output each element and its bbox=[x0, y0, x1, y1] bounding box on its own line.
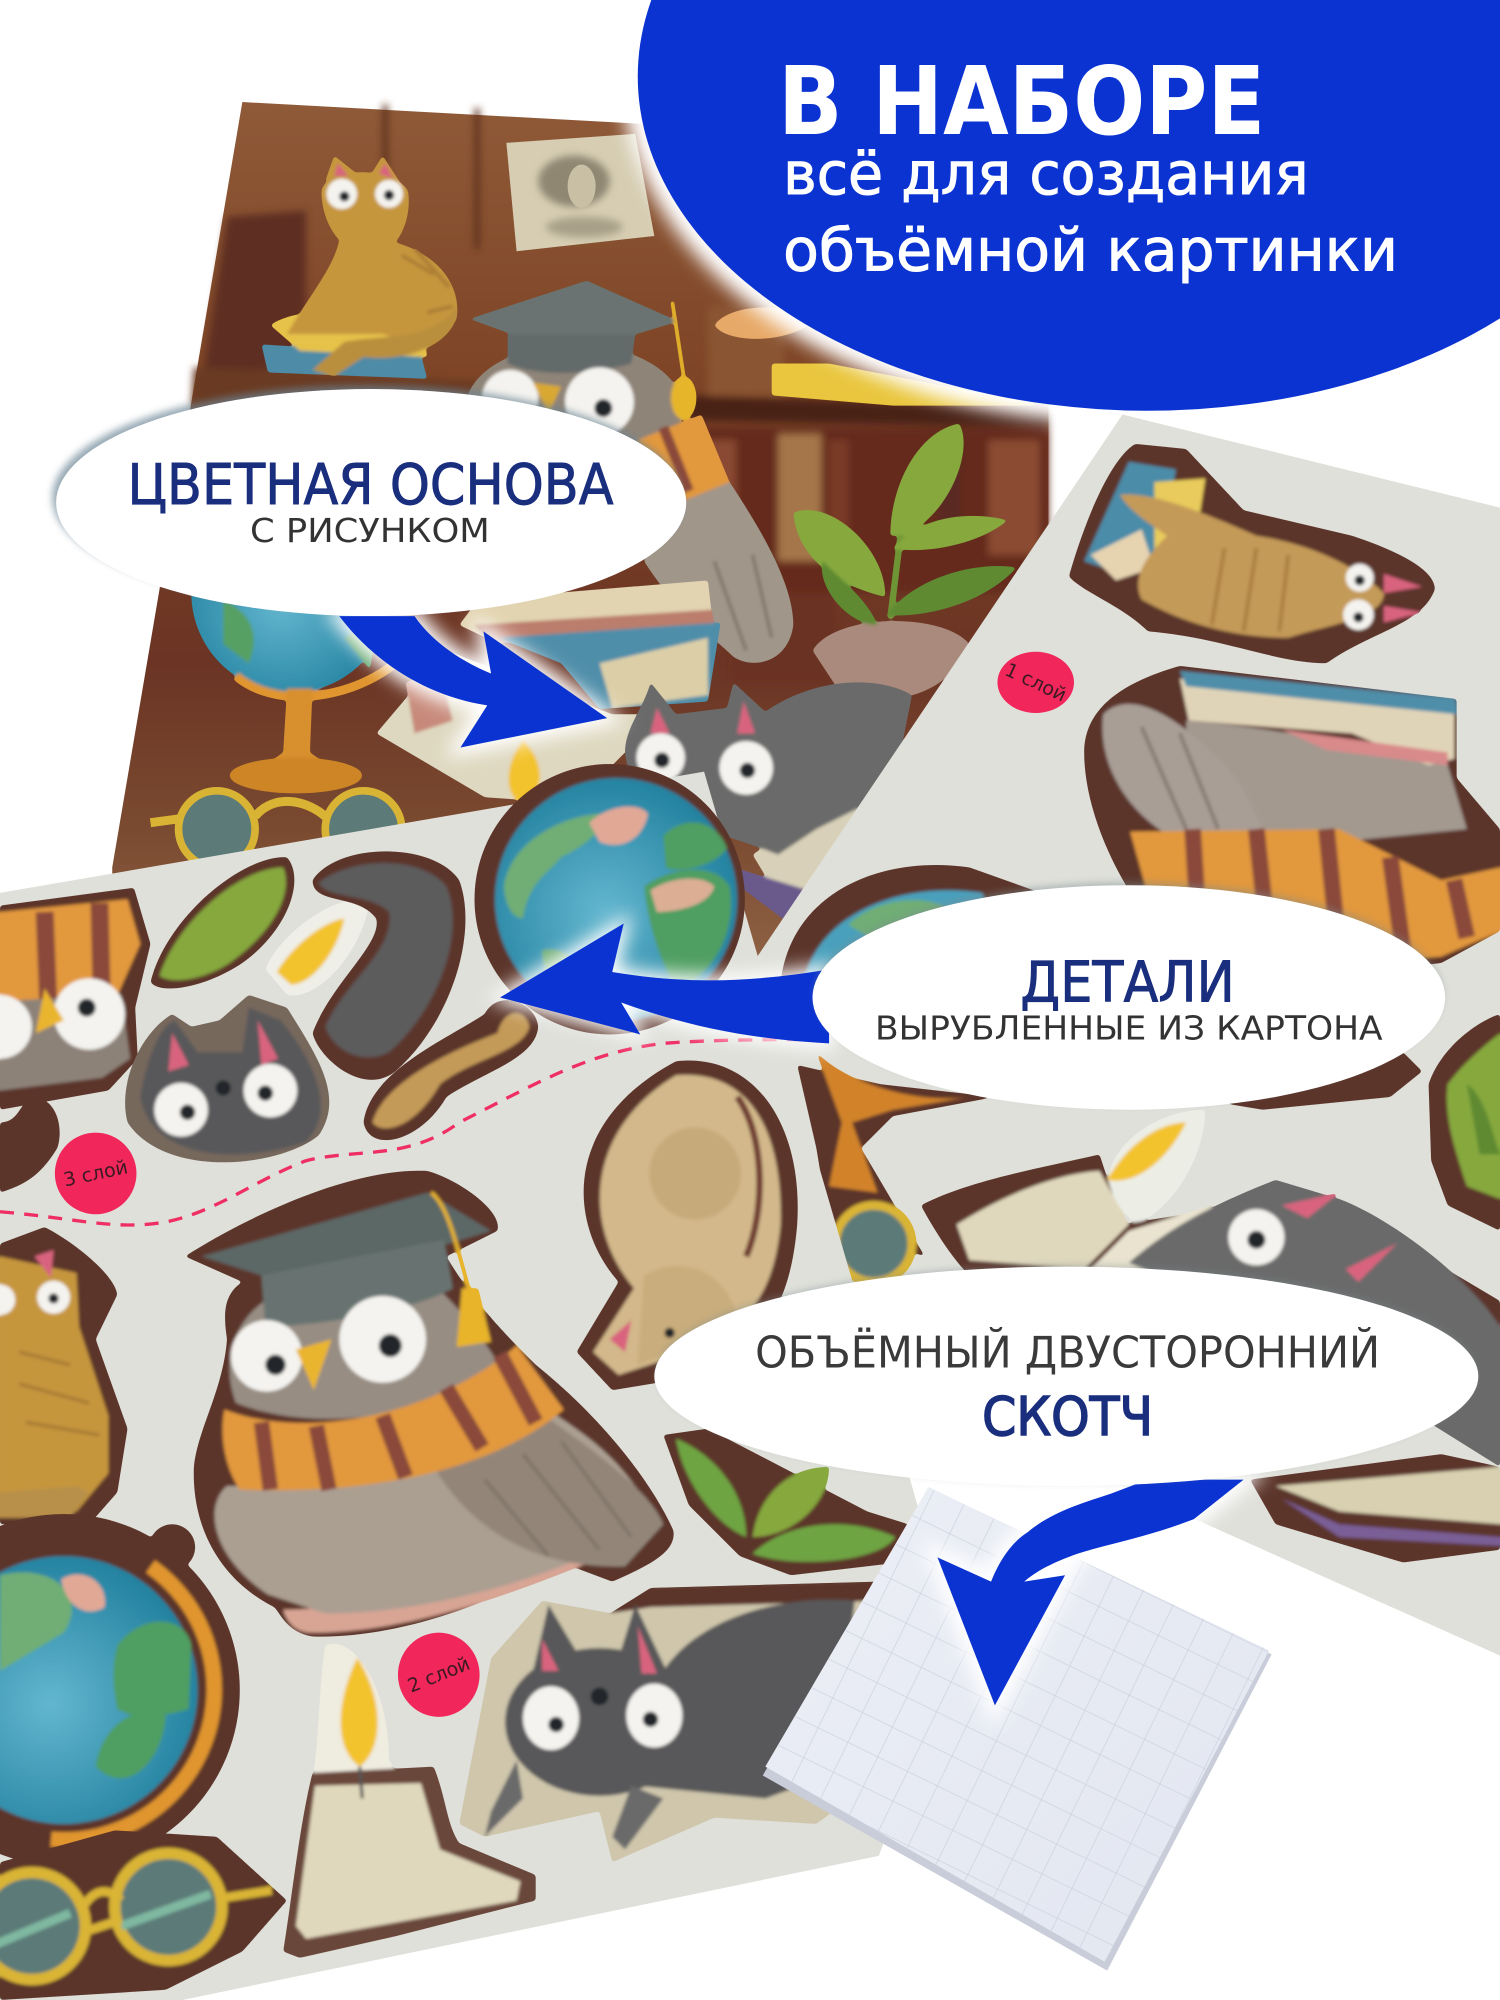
white oval: colour base callout bbox=[52, 385, 686, 616]
globe stand sticker bbox=[797, 1052, 995, 1282]
callout subheading: ВЫРУБЛЕННЫЕ ИЗ КАРТОНА bbox=[875, 1009, 1383, 1048]
panel: colour base poster bbox=[112, 102, 1048, 1008]
globe on stand bbox=[191, 494, 408, 793]
long stripe sticker bbox=[1224, 1052, 1422, 1110]
globe sticker on sheet bbox=[474, 764, 745, 1034]
open book sticker bbox=[1250, 1454, 1500, 1562]
callout heading: ДЕТАЛИ bbox=[1020, 950, 1235, 1015]
panel: double-sided foam tape sheet bbox=[763, 1487, 1272, 1971]
white glow around the title oval bbox=[622, 0, 1500, 426]
portrait bbox=[506, 134, 654, 251]
arrow: to die-cut parts bbox=[500, 923, 829, 1043]
globe sticker top bbox=[781, 865, 1059, 1020]
owl body bbox=[215, 1409, 657, 1614]
white oval: parts callout bbox=[812, 883, 1445, 1110]
glasses on poster bbox=[151, 791, 402, 867]
title: В НАБОРЕ bbox=[778, 47, 1265, 157]
grey cat head sticker bbox=[125, 995, 329, 1162]
owl scarf bbox=[223, 1346, 564, 1490]
yellow cat sticker left bbox=[0, 1227, 128, 1524]
plant sticker right bbox=[1429, 1014, 1500, 1231]
subtitle line 1: всё для создания bbox=[783, 140, 1309, 208]
label: layer 3: 3 слой bbox=[61, 1155, 130, 1191]
plant in pot bbox=[793, 423, 1017, 700]
panel: parts sheet layers 2 and 3 bbox=[0, 764, 957, 2000]
label: layer 2 bbox=[398, 1633, 480, 1717]
owl eyes and beak bbox=[231, 1296, 426, 1392]
yellow cat on books bbox=[261, 156, 457, 379]
callout heading: ЦВЕТНАЯ ОСНОВА bbox=[128, 453, 614, 518]
grey cat sticker on sheet bbox=[459, 1582, 880, 1862]
cat with scrolls sticker bbox=[1069, 444, 1435, 663]
title oval bbox=[638, 0, 1500, 411]
grey tail sticker bbox=[312, 851, 465, 1080]
candle sticker bbox=[283, 1643, 536, 1958]
label: layer 3 bbox=[55, 1133, 136, 1214]
big owl sticker bbox=[185, 1171, 674, 1637]
globe sticker bottom bbox=[0, 1514, 240, 1866]
callout heading: СКОТЧ bbox=[982, 1385, 1153, 1448]
owl lower part sticker bbox=[1084, 666, 1500, 982]
candle and grey cat sticker bbox=[921, 1110, 1500, 1467]
dashed cut line bbox=[0, 1040, 816, 1225]
owl wing feathers bbox=[485, 1441, 631, 1556]
callout subheading: С РИСУНКОМ bbox=[250, 511, 490, 550]
stack of books on poster bbox=[459, 580, 721, 709]
subtitle line 2: объёмной картинки bbox=[783, 216, 1398, 284]
owl head bbox=[230, 1276, 504, 1419]
small tail sticker bbox=[0, 1097, 60, 1193]
graduation cap bbox=[202, 1193, 491, 1347]
arrow: to colour base bbox=[339, 616, 607, 747]
candle flame sticker bbox=[265, 899, 370, 995]
yellow scroll on right shelf bbox=[772, 364, 1046, 406]
panel: parts sheet layer 1 bbox=[714, 415, 1500, 1656]
plant sticker bottom bbox=[663, 1429, 908, 1575]
owl feet bbox=[283, 1550, 589, 1633]
label: layer 2: 2 слой bbox=[404, 1652, 473, 1697]
callout subheading: ОБЪЁМНЫЙ ДВУСТОРОННИЙ bbox=[755, 1327, 1380, 1378]
grey cat on poster bbox=[625, 682, 912, 925]
open book with candle bbox=[376, 651, 663, 804]
owl wing bbox=[434, 1409, 663, 1566]
green leaf sticker bbox=[151, 857, 294, 989]
white oval: tape callout bbox=[654, 1265, 1478, 1486]
wall planks and bookshelves bbox=[191, 105, 1048, 682]
scarf piece sticker bbox=[0, 888, 151, 1110]
glasses sticker bbox=[0, 1830, 287, 2000]
curled beige cat sticker bbox=[577, 1060, 798, 1390]
yellow tail sticker bbox=[364, 1000, 538, 1140]
owl on poster bbox=[466, 281, 816, 663]
arrow: to tape bbox=[938, 1480, 1244, 1705]
label: layer 1: 1 слой bbox=[1001, 658, 1070, 706]
